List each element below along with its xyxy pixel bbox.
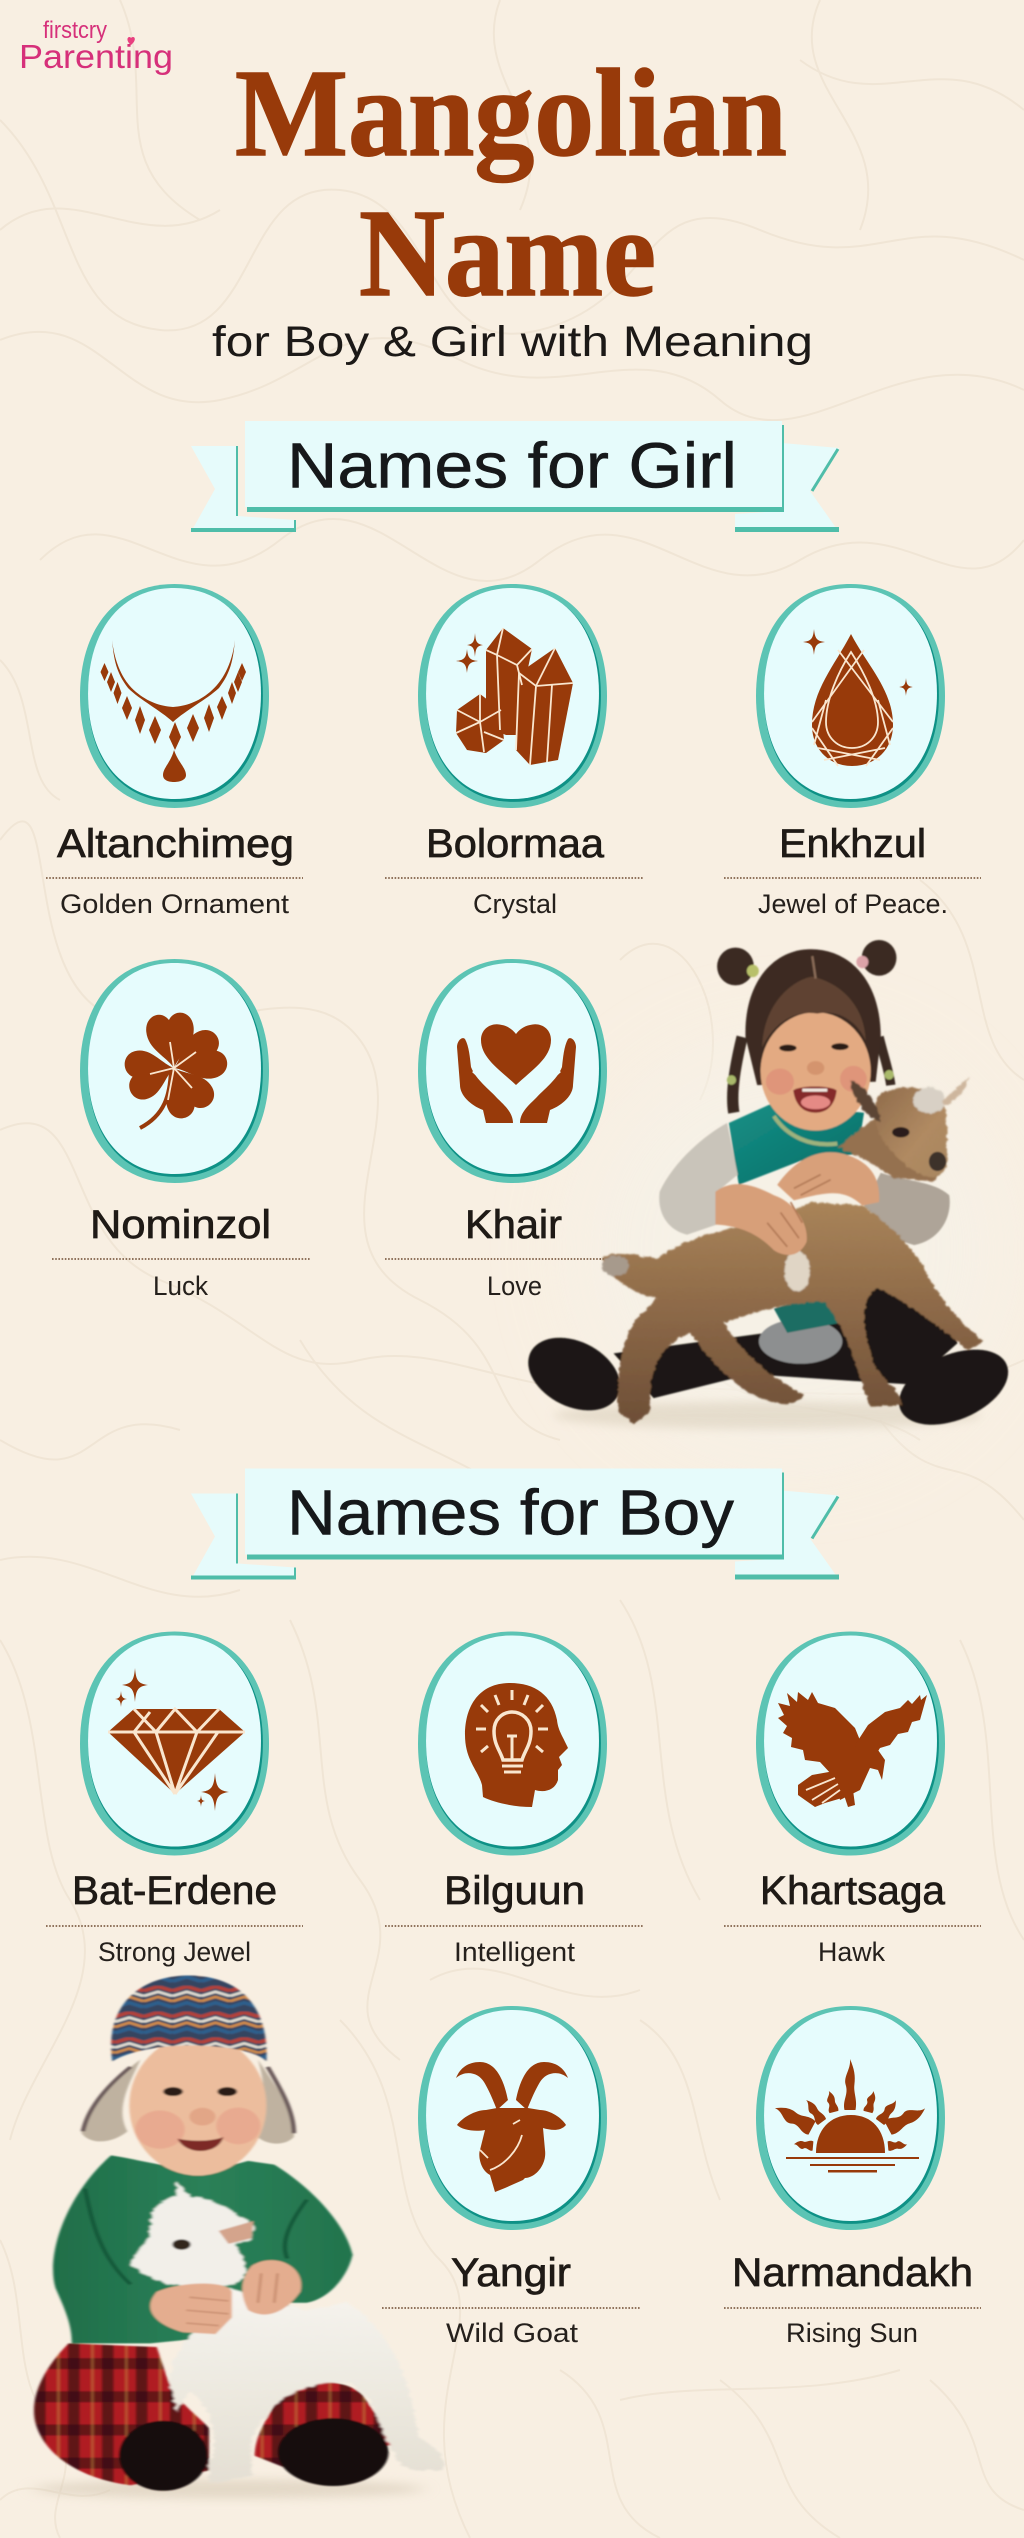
banner: Names for Boy: Names for Boy <box>287 1476 734 1548</box>
oval badge <box>756 584 945 808</box>
oval badge <box>418 1632 607 1856</box>
oval badge <box>80 959 269 1183</box>
logo: FirstCry Parenting: firstcry <box>43 17 107 44</box>
goat head <box>131 2181 255 2287</box>
braids <box>733 1037 742 1113</box>
oval badge <box>80 1632 269 1856</box>
card: Nominzol <box>52 959 310 1301</box>
title: Name <box>359 185 656 323</box>
legs <box>614 1285 958 1398</box>
banner: Names for Girl: Names for Girl <box>287 430 737 502</box>
banner: Names for Girl <box>191 421 839 532</box>
meaning: Luck <box>153 1271 208 1301</box>
name: Narmandakh <box>732 2251 973 2295</box>
photo: boy holding white goat <box>33 1975 444 2499</box>
card: Enkhzul <box>724 584 981 919</box>
oval badge <box>418 2006 607 2230</box>
name: Khartsaga <box>760 1869 946 1913</box>
logo: FirstCry Parenting <box>19 17 173 75</box>
goat head <box>851 1077 969 1177</box>
card: Yangir <box>382 2006 640 2348</box>
knit hat <box>111 1975 267 2061</box>
card: Narmandakh <box>724 2006 981 2348</box>
title <box>235 45 787 323</box>
card: Bolormaa <box>385 584 643 919</box>
card: Khartsaga <box>724 1632 981 1967</box>
icon: four leaf clover <box>122 1011 231 1128</box>
name: Bolormaa <box>426 822 605 866</box>
meaning: Strong Jewel <box>98 1937 251 1967</box>
icon: rising sun <box>771 2059 929 2172</box>
face <box>129 2036 266 2176</box>
oval badge <box>418 584 607 808</box>
plaid pants <box>34 2343 209 2485</box>
icon: hawk <box>778 1692 927 1807</box>
meaning: Crystal <box>473 889 557 919</box>
name: Yangir <box>451 2251 571 2295</box>
card: Altanchimeg <box>46 584 303 919</box>
icon: head with light bulb <box>465 1683 568 1807</box>
meaning: Love <box>487 1271 542 1301</box>
banner: Names for Boy <box>191 1468 839 1580</box>
name: Altanchimeg <box>57 822 294 866</box>
icon: pear gem <box>803 629 913 766</box>
name: Enkhzul <box>779 822 926 866</box>
meaning: Golden Ornament <box>60 889 290 919</box>
girl head <box>745 949 881 1085</box>
card: Bat-Erdene <box>46 1632 303 1967</box>
hair buns <box>717 948 754 985</box>
name: Nominzol <box>90 1203 271 1247</box>
photo: girl hugging brown goat <box>517 940 1019 1440</box>
name: Bilguun <box>444 1869 585 1913</box>
subtitle: for Boy & Girl with Meaning <box>212 318 813 366</box>
meaning: Wild Goat <box>446 2318 579 2348</box>
brown goat body <box>602 1116 984 1424</box>
icon: crystals <box>456 628 573 765</box>
title: Mangolian <box>235 45 787 183</box>
meaning: Rising Sun <box>786 2318 918 2348</box>
icon: wild goat head <box>456 2062 568 2192</box>
card: Bilguun <box>385 1632 643 1967</box>
card: Khair <box>385 959 610 1301</box>
name: Bat-Erdene <box>72 1869 277 1913</box>
soft light backdrop behind girl photo <box>575 1040 1005 1460</box>
floor shadow <box>553 1402 981 1429</box>
oval badge <box>756 2006 945 2230</box>
oval badge <box>418 959 607 1183</box>
white goat body <box>170 2288 444 2483</box>
icon: diamond <box>108 1668 245 1811</box>
black socks <box>119 2421 208 2491</box>
icon: necklace <box>100 640 246 782</box>
name: Khair <box>465 1203 562 1247</box>
logo: FirstCry Parenting: Parenting <box>19 38 173 75</box>
hands <box>242 2260 301 2315</box>
girl arms and hands <box>715 1184 807 1255</box>
oval badge <box>756 1632 945 1856</box>
icon: hands holding heart <box>457 1024 576 1123</box>
oval badge <box>80 584 269 808</box>
torso <box>729 1104 864 1185</box>
meaning: Intelligent <box>454 1937 576 1967</box>
floor shadow <box>33 2479 424 2499</box>
sleeves <box>659 1123 738 1235</box>
green shirt <box>53 2155 353 2343</box>
meaning: Hawk <box>818 1937 885 1967</box>
ear flaps <box>82 2060 140 2141</box>
meaning: Jewel of Peace. <box>758 889 948 919</box>
